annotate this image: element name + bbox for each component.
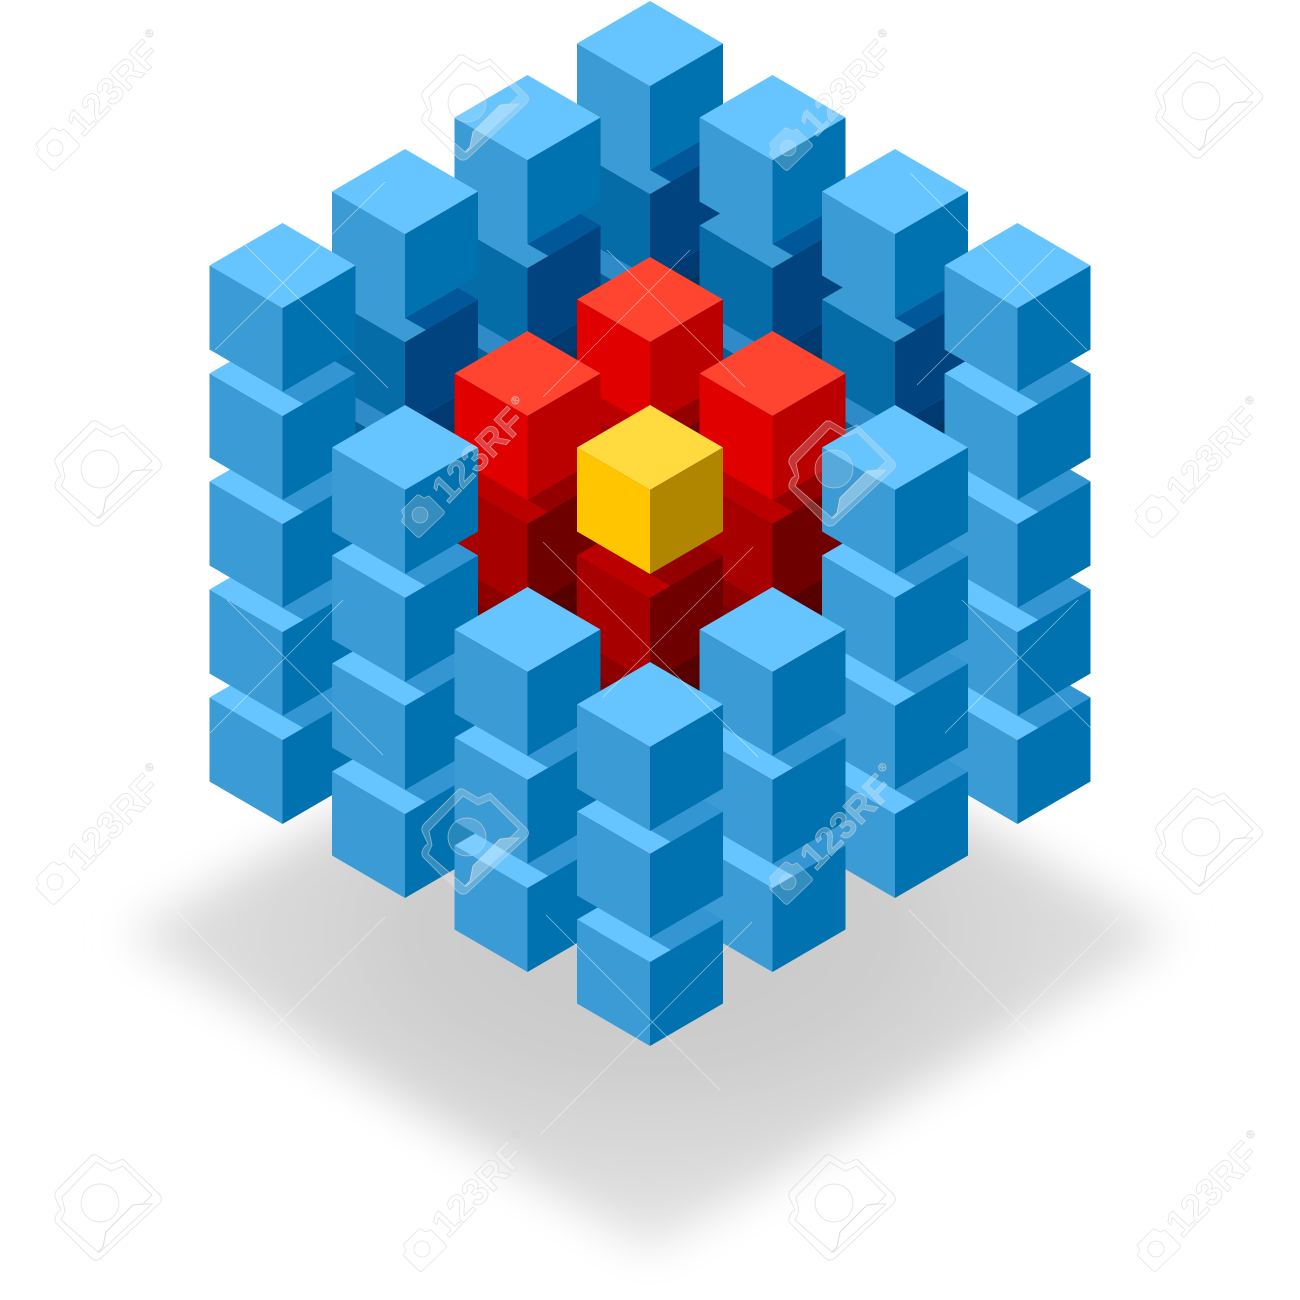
watermark row 1: 123RF [792,33,901,144]
red column: right [700,331,846,824]
far left column [210,223,356,824]
watermark row 2: 123RF [1158,400,1267,511]
front corner column [577,662,723,1046]
watermark row 4 [55,1128,1267,1271]
watermark row 3: 123RF [792,767,901,878]
front left column, stepped [332,405,478,898]
far right column [944,223,1090,824]
watermark row 1: ® [143,27,157,41]
front right column, stepped [822,405,968,898]
watermark row 3: 123RF [59,767,168,878]
ground shadow [125,640,1175,1252]
back left column 2 [332,149,478,750]
back right column 1 [700,75,846,676]
watermark row 2: ® [1243,394,1257,408]
back right column 2 [822,149,968,750]
red column: rear [577,257,723,750]
watermark row 3: ® [876,761,890,775]
front column right of corner [700,587,846,972]
watermark row 4: 123RF [1158,1134,1267,1245]
watermark row 3 [37,761,1263,904]
watermark row 1 [37,27,1263,170]
watermark row 4: 123RF [424,1134,533,1245]
watermark row 2: 123RF [424,400,533,511]
watermark row 4: ® [1244,1128,1258,1142]
back left column 1 [454,75,600,676]
front column left of corner [454,587,600,972]
watermark row 2: ® [509,394,523,408]
red column: left [454,331,600,824]
watermark row 1: 123RF [59,33,168,144]
centre column with yellow cube on top [577,405,723,898]
cube structure [210,1,1090,1046]
back corner column [577,1,723,602]
watermark row 2 [55,394,1267,537]
watermark row 1: ® [876,27,890,41]
watermark row 4: ® [510,1128,524,1142]
watermark row 3: ® [143,761,157,775]
